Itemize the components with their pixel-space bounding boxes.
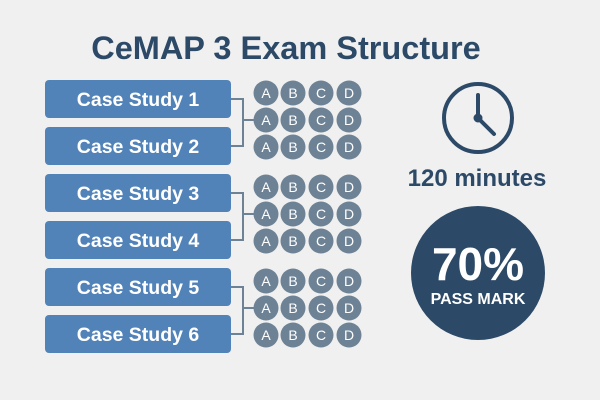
answer option circles: D	[344, 179, 354, 195]
answer option circles: D	[344, 206, 354, 222]
answer option circles: B	[288, 179, 298, 195]
answer option circles: B	[288, 233, 298, 249]
answer option circles: B	[288, 300, 298, 316]
icon: clock	[444, 84, 512, 152]
pass mark badge: 70%	[432, 238, 524, 290]
answer option circles: B	[288, 327, 298, 343]
answer option circles: A	[261, 233, 271, 249]
case study group 2: Case Study 3	[77, 183, 199, 205]
answer option circles: C	[316, 233, 326, 249]
answer option circles: D	[344, 273, 354, 289]
case study group 2	[45, 174, 254, 259]
answer option circles: B	[288, 139, 298, 155]
answer option circles: D	[344, 112, 354, 128]
answer option circles: C	[316, 179, 326, 195]
answer option circles: A	[261, 327, 271, 343]
case study group 1	[45, 80, 254, 165]
answer option circles	[254, 80, 362, 348]
case study group 3	[45, 268, 254, 353]
answer option circles: D	[344, 300, 354, 316]
title: CeMAP 3 Exam Structure	[91, 30, 481, 66]
answer option circles: B	[288, 112, 298, 128]
answer option circles: C	[316, 85, 326, 101]
answer option circles: C	[316, 273, 326, 289]
answer option circles: D	[344, 85, 354, 101]
pass mark badge	[411, 206, 545, 340]
answer option circles: A	[261, 139, 271, 155]
answer option circles: D	[344, 233, 354, 249]
pass mark badge: PASS MARK	[431, 291, 526, 308]
answer option circles: C	[316, 112, 326, 128]
answer option circles: C	[316, 327, 326, 343]
answer option circles: A	[261, 273, 271, 289]
duration label: 120 minutes	[408, 165, 546, 192]
answer option circles: B	[288, 85, 298, 101]
answer option circles: C	[316, 300, 326, 316]
answer option circles: D	[344, 327, 354, 343]
answer option circles: B	[288, 206, 298, 222]
answer option circles: B	[288, 273, 298, 289]
answer option circles: A	[261, 206, 271, 222]
case study group 1: Case Study 1	[77, 89, 199, 111]
answer option circles: D	[344, 139, 354, 155]
answer option circles: C	[316, 139, 326, 155]
answer option circles: A	[261, 85, 271, 101]
answer option circles: A	[261, 112, 271, 128]
case study group 3: Case Study 6	[77, 324, 199, 346]
case study group 3: Case Study 5	[77, 277, 199, 299]
answer option circles: A	[261, 179, 271, 195]
answer option circles: A	[261, 300, 271, 316]
case study group 1: Case Study 2	[77, 136, 199, 158]
case study group 2: Case Study 4	[77, 230, 199, 252]
answer option circles: C	[316, 206, 326, 222]
